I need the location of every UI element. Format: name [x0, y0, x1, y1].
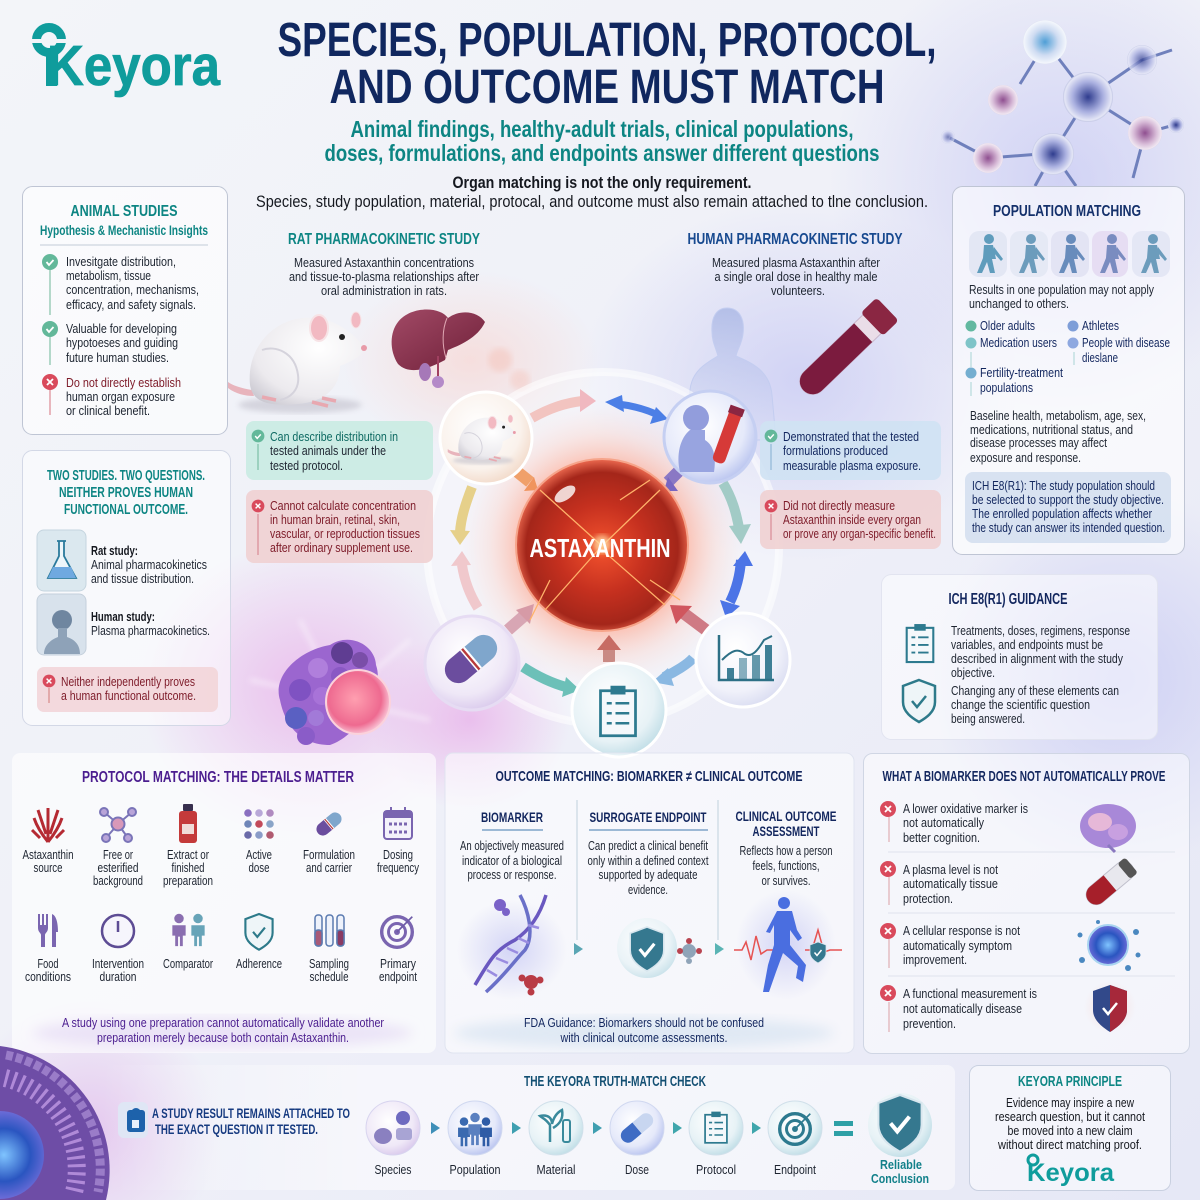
- icon: flask: [37, 530, 86, 591]
- icon: split shield: [1084, 981, 1136, 1033]
- text: principle: Evidence may inspire a new: [1006, 1095, 1134, 1110]
- node: clipboard: [572, 663, 666, 757]
- label: astaxanthin source: Astaxanthin: [22, 847, 74, 862]
- callout: FDA guidance: with clinical outcome assessments.: [560, 1030, 728, 1045]
- column: biomarker: BIOMARKER: [481, 809, 543, 825]
- step: dose: [610, 1101, 664, 1177]
- list: animal study points: metabolism, tissue: [66, 268, 151, 283]
- arrow: species to population: [431, 1122, 440, 1134]
- label: dosing frequency: Dosing: [383, 847, 413, 862]
- icon: brain: [1080, 804, 1136, 852]
- text: baseline health: [970, 408, 1146, 465]
- column: surrogate endpoint: supported by adequate: [598, 867, 698, 882]
- text: rat study: Animal pharmacokinetics: [91, 557, 207, 572]
- label: active dose: Active: [246, 847, 272, 862]
- node: capsule: [425, 616, 519, 710]
- label: free or esterified: esterified: [98, 860, 138, 875]
- node: rat: [440, 392, 532, 484]
- icon: active dose dots: [244, 809, 274, 839]
- heading: two studies: NEITHER PROVES HUMAN: [59, 484, 193, 501]
- panel: two studies: [22, 450, 230, 726]
- column: biomarker: indicator of a biological: [462, 853, 562, 868]
- callout: one preparation: A study using one preparation cannot automatically validate another: [62, 1015, 385, 1030]
- text: rat study description: oral administration in rats.: [321, 283, 447, 298]
- title: SPECIES, POPULATION, PROTOCOL,: [278, 14, 936, 67]
- callout: rat cannot calculate: in human brain, retinal, skin,: [270, 512, 400, 527]
- callout: human did not measure: [760, 490, 941, 549]
- callout: one preparation: preparation merely because both contain Astaxanthin.: [97, 1030, 349, 1045]
- label: intervention duration: [92, 956, 144, 984]
- text: human study: Plasma pharmacokinetics.: [91, 623, 210, 638]
- label: primary endpoint: Primary: [380, 956, 416, 971]
- label: astaxanthin source: [22, 847, 74, 875]
- heading: protocol matching: PROTOCOL MATCHING: THE DETAILS MATTER: [82, 769, 354, 786]
- callout: human did not measure: or prove any organ-specific benefit.: [783, 526, 936, 541]
- sphere: astaxanthin: [516, 459, 688, 631]
- heading: ICH guidance: ICH E8(R1) GUIDANCE: [948, 591, 1068, 608]
- text: results may not apply: Results in one population may not apply: [969, 282, 1154, 297]
- label: formulation and carrier: and carrier: [306, 860, 352, 875]
- icon: equals sign: [834, 1121, 853, 1136]
- column: clinical outcome: Reflects how a person: [740, 843, 832, 858]
- decorative molecule top right: [941, 20, 1184, 186]
- step: population: [448, 1101, 502, 1177]
- label: astaxanthin source: source: [34, 860, 62, 875]
- column: surrogate endpoint: SURROGATE ENDPOINT: [590, 809, 707, 825]
- intro text: [256, 173, 928, 211]
- step: protocol: Protocol: [696, 1162, 736, 1177]
- text: results may not apply: [969, 282, 1154, 311]
- list: population types: Fertility-treatment: [980, 365, 1063, 380]
- text: human study description: [712, 255, 881, 298]
- icon: clipboard: [907, 624, 933, 662]
- item: cellular response: A cellular response is not: [903, 923, 1020, 938]
- step: species: Species: [374, 1162, 412, 1177]
- list: animal study points: Valuable for developing: [66, 321, 177, 336]
- list: population types: dieslane: [1082, 350, 1118, 365]
- text: human study: Human study:: [91, 609, 155, 624]
- callout: rat can describe: [246, 421, 433, 480]
- diagram: central astaxanthin cycle: [425, 372, 790, 757]
- list: animal study points: efficacy, and safety signals.: [66, 297, 196, 312]
- label: formulation and carrier: Formulation: [303, 847, 355, 862]
- arrows around the ring: [460, 401, 741, 687]
- icon: sampling tubes: [315, 915, 344, 946]
- label: food conditions: [25, 956, 71, 984]
- text: principle: [995, 1095, 1145, 1152]
- heading: human pharmacokinetic study: HUMAN PHARMACOKINETIC STUDY: [688, 231, 903, 248]
- label: comparator: Comparator: [163, 956, 213, 971]
- text: results may not apply: unchanged to others.: [969, 296, 1069, 311]
- arrow: dose to protocol: [673, 1122, 682, 1134]
- arrow: material to dose: [593, 1122, 602, 1134]
- heading: truth-match check: THE KEYORA TRUTH-MATCH CHECK: [524, 1073, 706, 1090]
- label: free or esterified: background: [93, 873, 143, 888]
- title: [278, 14, 936, 114]
- column: biomarker: An objectively measured: [460, 838, 564, 853]
- callout: human did not measure: Did not directly measure: [783, 498, 895, 513]
- item: functional measurement: prevention.: [903, 1016, 956, 1031]
- column: biomarker: [457, 809, 567, 1000]
- callout: neither proves: a human functional outcome.: [61, 688, 196, 703]
- heading: two studies: TWO STUDIES. TWO QUESTIONS.: [47, 467, 205, 484]
- callout: rat can describe: tested protocol.: [270, 458, 343, 473]
- text: principle: be moved into a new claim: [1008, 1123, 1132, 1138]
- illustration: blood tube: [792, 298, 899, 402]
- illustration: runner: [734, 890, 842, 1000]
- column: surrogate endpoint: Can predict a clinical benefit: [588, 838, 708, 853]
- text: baseline health: disease processes may affect: [970, 435, 1107, 450]
- label: active dose: [246, 847, 272, 875]
- arrow: population to material: [512, 1122, 521, 1134]
- heading: animal studies: Hypothesis & Mechanistic Insights: [40, 222, 208, 238]
- text: baseline health: exposure and response.: [970, 450, 1081, 465]
- column: surrogate endpoint: [588, 809, 709, 978]
- icon: bottle: [179, 804, 197, 843]
- step: endpoint: [768, 1101, 822, 1177]
- panel: ICH guidance: [882, 574, 1158, 740]
- label: food conditions: Food: [38, 956, 58, 971]
- item: oxidative marker: not automatically: [903, 815, 984, 830]
- list: population types: People with disease: [1082, 335, 1170, 350]
- heading: animal studies: [40, 203, 208, 238]
- callout: rat can describe: tested animals under the: [270, 443, 386, 458]
- subtitle: [324, 116, 880, 166]
- text: rat study description: and tissue-to-plasma relationships after: [289, 269, 480, 284]
- callout: neither proves: [37, 667, 218, 712]
- label: extract or finished: [163, 847, 213, 888]
- callout: rat can describe: Can describe distribution in: [270, 429, 398, 444]
- column: clinical outcome: [734, 808, 842, 1000]
- callout: rat cannot calculate: vascular, or reproduction tissues: [270, 526, 420, 541]
- label: adherence: Adherence: [236, 956, 282, 971]
- icon: calendar: [384, 807, 412, 839]
- logo: small Keyora: Keyora: [1027, 1159, 1115, 1187]
- label: free or esterified: [93, 847, 143, 888]
- list: population types: Medication users: [980, 335, 1057, 350]
- item: plasma level: automatically tissue: [903, 876, 998, 891]
- illustration: surrogate shield: [617, 918, 702, 978]
- arrow: protocol to endpoint: [752, 1122, 761, 1134]
- arrow: biomarker to surrogate: [574, 943, 583, 955]
- label: sampling schedule: Sampling: [309, 956, 349, 971]
- text: rat study description: [289, 255, 480, 298]
- icon: comparator people: [172, 914, 205, 946]
- text: ICH guidance: being answered.: [951, 711, 1025, 726]
- list: population types: populations: [980, 380, 1033, 395]
- panel: Keyora principle: [970, 1066, 1170, 1190]
- label: sampling schedule: schedule: [310, 969, 348, 984]
- step: material: Material: [536, 1162, 576, 1177]
- callout: ICH E8 population: The enrolled population affects whether: [972, 506, 1153, 521]
- illustration: human figure: [688, 308, 776, 440]
- panel: truth-match check: [100, 1065, 955, 1190]
- column: clinical outcome: or survives.: [762, 873, 810, 888]
- text: baseline health: medications, nutritional status, and: [970, 422, 1133, 437]
- label: free or esterified: Free or: [103, 847, 133, 862]
- subtitle: doses, formulations, and endpoints answer different questions: [324, 140, 880, 166]
- callout: rat cannot calculate: [246, 490, 433, 563]
- text: principle: without direct matching proof.: [997, 1137, 1142, 1152]
- illustration: purple cell cluster: [250, 620, 430, 745]
- callout: human demonstrated: [760, 421, 941, 480]
- label: extract or finished: Extract or: [167, 847, 210, 862]
- text: human study: [91, 609, 210, 638]
- text: ICH guidance: objective.: [951, 665, 995, 680]
- icons: five population figures: [969, 231, 1170, 277]
- item: functional measurement: [880, 981, 1136, 1033]
- callout: FDA guidance: [454, 1015, 834, 1049]
- label: intervention duration: duration: [100, 969, 136, 984]
- callout: ICH E8 population: [965, 472, 1171, 543]
- item: functional measurement: A functional measurement is: [903, 986, 1037, 1001]
- list: animal study points: Do not directly establish: [66, 375, 181, 390]
- icon: target: [382, 917, 412, 947]
- label: dosing frequency: [377, 847, 419, 875]
- heading: animal studies: ANIMAL STUDIES: [70, 203, 178, 220]
- step: dose: Dose: [625, 1162, 649, 1177]
- list: population types: Athletes: [1082, 318, 1119, 333]
- list: animal study points: or clinical benefit.: [66, 403, 150, 418]
- text: ICH guidance: variables, and endpoints must be: [951, 637, 1103, 652]
- icon: capsule: [314, 810, 344, 838]
- title: AND OUTCOME MUST MATCH: [330, 61, 884, 114]
- illustration: DNA: [457, 895, 567, 1000]
- column: biomarker: process or response.: [468, 867, 556, 882]
- text: rat study description: Measured Astaxanthin concentrations: [294, 255, 474, 270]
- text: rat study: [91, 543, 207, 586]
- callout: rat cannot calculate: Cannot calculate concentration: [270, 498, 416, 513]
- heading: two studies: [47, 467, 205, 518]
- statement: study result: THE EXACT QUESTION IT TESTED.: [155, 1121, 318, 1137]
- statement: study result: A STUDY RESULT REMAINS ATTACHED TO: [152, 1105, 350, 1121]
- node: bar chart: [696, 613, 790, 707]
- illustration: purple cell bottom left: [0, 1046, 110, 1200]
- list: animal study points: Invesitgate distribution,: [66, 254, 176, 269]
- item: plasma level: [880, 857, 1138, 909]
- intro text: Organ matching is not the only requirement.: [452, 173, 752, 192]
- callout: rat cannot calculate: after ordinary supplement use.: [270, 540, 413, 555]
- step: material: [529, 1101, 583, 1177]
- list: animal study points: concentration, mechanisms,: [66, 282, 199, 297]
- list: population types: [966, 318, 1170, 396]
- subtitle: Animal findings, healthy-adult trials, clinical populations,: [350, 116, 854, 142]
- text: ICH guidance: change the scientific question: [951, 697, 1090, 712]
- text: human study description: a single oral dose in healthy male: [714, 269, 878, 284]
- panel: animal studies: [22, 186, 228, 434]
- item: oxidative marker: A lower oxidative marker is: [903, 801, 1028, 816]
- callout: human demonstrated: measurable plasma exposure.: [783, 458, 921, 473]
- column: clinical outcome: feels, functions,: [752, 858, 820, 873]
- callout: FDA guidance: FDA Guidance: Biomarkers should not be confused: [524, 1015, 764, 1030]
- list: animal study points: hypotoeses and guiding: [66, 335, 178, 350]
- icon: tube: [1082, 857, 1138, 909]
- item: oxidative marker: better cognition.: [903, 830, 980, 845]
- heading: rat pharmacokinetic study: RAT PHARMACOKINETIC STUDY: [288, 231, 480, 248]
- callout: one preparation: [33, 1015, 413, 1049]
- panel: outcome matching: [445, 753, 854, 1053]
- heading: two studies: FUNCTIONAL OUTCOME.: [64, 501, 188, 518]
- list: animal study points: [42, 254, 199, 418]
- label: extract or finished: finished: [172, 860, 204, 875]
- column: clinical outcome: ASSESSMENT: [752, 823, 820, 839]
- heading: outcome matching: OUTCOME MATCHING: BIOMARKER ≠ CLINICAL OUTCOME: [496, 768, 802, 785]
- sphere: astaxanthin: ASTAXANTHIN: [530, 533, 670, 563]
- label: primary endpoint: [379, 956, 417, 984]
- text: rat study: Rat study:: [91, 543, 138, 558]
- panel: population matching: [952, 186, 1184, 554]
- text: ICH guidance: Treatments, doses, regimens, response: [951, 623, 1130, 638]
- text: ICH guidance: Changing any of these elements can: [951, 683, 1119, 698]
- illustration: rat: [228, 312, 367, 413]
- list: population types: Older adults: [980, 318, 1035, 333]
- label: intervention duration: Intervention: [92, 956, 144, 971]
- list: animal study points: future human studies.: [66, 350, 169, 365]
- text: baseline health: Baseline health, metabolism, age, sex,: [970, 408, 1146, 423]
- node: human and blood tube: [664, 391, 756, 483]
- item: cellular response: automatically symptom: [903, 938, 1012, 953]
- item: oxidative marker: [880, 801, 1136, 852]
- panel: what a biomarker does not prove: [864, 754, 1190, 1054]
- icon: fork and knife: [38, 914, 58, 947]
- icon: molecule: [100, 808, 136, 842]
- label: sampling schedule: [309, 956, 349, 984]
- icon: astaxanthin source: [32, 808, 64, 842]
- icon: clock: [102, 915, 134, 947]
- item: cellular response: [880, 920, 1140, 971]
- item: cellular response: improvement.: [903, 952, 967, 967]
- icon: adherence shield: [245, 914, 273, 950]
- icon: check shield: [903, 680, 935, 722]
- column: surrogate endpoint: only within a defined context: [588, 853, 709, 868]
- step: species: [366, 1101, 420, 1177]
- step: endpoint: Endpoint: [774, 1162, 816, 1177]
- item: functional measurement: not automatically disease: [903, 1001, 1022, 1016]
- text: ICH guidance: [951, 623, 1130, 726]
- item: plasma level: A plasma level is not: [903, 862, 998, 877]
- panel: protocol matching: [12, 753, 436, 1053]
- label: food conditions: conditions: [25, 969, 71, 984]
- text: principle: research question, but it cannot: [995, 1109, 1145, 1124]
- heading: Keyora principle: KEYORA PRINCIPLE: [1018, 1073, 1122, 1090]
- result: reliable conclusion: Reliable: [880, 1157, 922, 1172]
- column: surrogate endpoint: evidence.: [628, 882, 668, 897]
- icon: cell: [1078, 920, 1140, 971]
- logo: Keyora: Keyora: [47, 34, 221, 98]
- statement: study result: [118, 1102, 350, 1138]
- callout: human demonstrated: formulations produced: [783, 443, 888, 458]
- illustration: liver: [392, 309, 530, 390]
- step: protocol: [689, 1101, 743, 1177]
- step: population: Population: [450, 1162, 500, 1177]
- label: dosing frequency: frequency: [377, 860, 419, 875]
- arrow: surrogate to clinical: [715, 943, 724, 955]
- callout: human demonstrated: Demonstrated that the tested: [783, 429, 919, 444]
- heading: population matching: POPULATION MATCHING: [993, 203, 1141, 220]
- text: human study description: Measured plasma Astaxanthin after: [712, 255, 881, 270]
- icon: human head: [37, 594, 86, 655]
- label: active dose: dose: [248, 860, 270, 875]
- callout: neither proves: Neither independently proves: [61, 674, 195, 689]
- callout: human did not measure: Astaxanthin inside every organ: [783, 512, 921, 527]
- text: human study description: volunteers.: [771, 283, 825, 298]
- list: animal study points: human organ exposure: [66, 389, 175, 404]
- text: rat study: and tissue distribution.: [91, 571, 194, 586]
- result: reliable conclusion: [868, 1093, 932, 1186]
- intro text: Species, study population, material, protocal, and outcome must also remain attached to tlne conclusion.: [256, 192, 928, 211]
- result: reliable conclusion: Conclusion: [871, 1171, 929, 1186]
- column: clinical outcome: CLINICAL OUTCOME: [736, 808, 836, 824]
- label: extract or finished: preparation: [163, 873, 213, 888]
- label: formulation and carrier: [303, 847, 355, 875]
- label: primary endpoint: endpoint: [379, 969, 417, 984]
- item: plasma level: protection.: [903, 891, 953, 906]
- text: ICH guidance: described in alignment with the study: [951, 651, 1123, 666]
